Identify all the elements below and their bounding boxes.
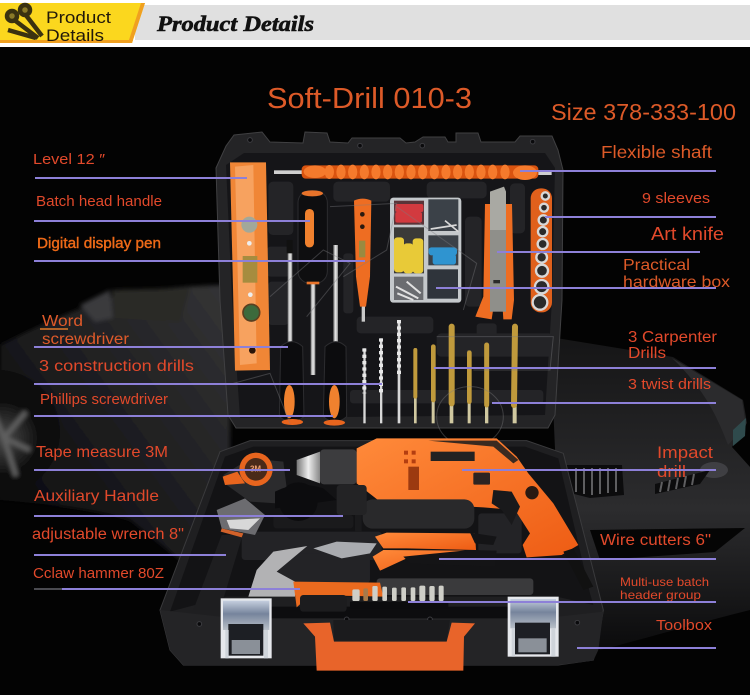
tool: nut screwdriver — [298, 190, 327, 375]
tool: wire cutters — [313, 533, 497, 571]
tool: impact drill — [275, 438, 593, 590]
callout: Flexible shaft: Flexible shaft — [601, 142, 712, 162]
header bar — [0, 0, 750, 47]
header tag: yellow — [0, 3, 145, 43]
callout: Practical hardware box: Practical — [623, 257, 690, 274]
tool: socket sleeves — [531, 188, 552, 312]
callout: Impact drill: drill — [657, 462, 686, 481]
tool: claw hammer — [248, 546, 533, 612]
callout: Word screwdriver: Word — [42, 313, 83, 330]
callout: Multi-use batch header group: Multi-use batch — [620, 575, 709, 589]
case interior — [170, 447, 593, 612]
callout: Batch head handle: Batch head handle — [36, 194, 162, 210]
tool: drill bits — [363, 320, 517, 423]
case screws — [197, 617, 580, 626]
tool: tape measure: 3M — [250, 465, 261, 474]
callout: Multi-use batch header group: header group — [620, 588, 701, 602]
callout: Toolbox: Toolbox — [656, 617, 713, 634]
callout: Wire cutters: Wire cutters 6" — [600, 532, 711, 549]
background car right — [550, 337, 750, 650]
watermark — [233, 203, 553, 447]
callout: 3 construction drills: 3 construction drills — [39, 358, 194, 375]
size label: Size 378-333-100 — [551, 99, 736, 125]
tool: auxiliary handle — [273, 482, 474, 532]
tool: art knife — [475, 187, 514, 319]
callout: Practical hardware box: hardware box — [623, 274, 730, 291]
title: Soft-Drill 010-3: Soft-Drill 010-3 — [267, 83, 472, 115]
callout: Tape measure 3M: Tape measure 3M — [36, 444, 168, 461]
callout: Impact drill — [462, 443, 716, 481]
latch left — [221, 598, 272, 658]
panel: lower tool case — [160, 438, 603, 671]
callout: Word screwdriver: screwdriver — [42, 331, 129, 348]
callout: Toolbox — [577, 617, 716, 648]
callout: 3 Carpenter Drills — [434, 329, 717, 368]
tool: spirit level — [230, 162, 270, 371]
tool: flexible shaft — [274, 165, 552, 180]
case shell — [216, 132, 563, 428]
tag text — [46, 8, 111, 45]
case front — [160, 610, 603, 665]
callout: Impact drill: Impact — [657, 443, 713, 462]
callout: 3 twist drills: 3 twist drills — [628, 377, 711, 393]
case tray — [226, 153, 555, 418]
tool: batch head group — [350, 586, 448, 609]
callout: Auxiliary Handle: Auxiliary Handle — [34, 488, 159, 505]
tool: digital display pen — [354, 199, 371, 322]
tool: slotted screwdriver — [279, 240, 304, 425]
callout: Level 12: Level 12 ″ — [33, 151, 106, 168]
panel: upper tool case — [216, 132, 563, 447]
case shell — [160, 441, 603, 665]
callout: Cclaw hammer: Cclaw hammer 80Z — [33, 565, 164, 582]
heading: Product Details: Product Details — [156, 11, 314, 36]
callout: Art knife: Art knife — [651, 224, 724, 244]
case handle — [303, 620, 475, 671]
foam ledges — [242, 513, 522, 583]
callout: Practical hardware box — [436, 257, 730, 291]
callout: adjustable wrench: adjustable wrench 8" — [32, 526, 184, 543]
callout: 3 Carpenter Drills: 3 Carpenter — [628, 329, 717, 346]
tag text: Product — [46, 8, 111, 27]
latch right — [508, 597, 559, 657]
background car left — [0, 285, 230, 600]
icon: tools — [7, 5, 42, 38]
case screws — [248, 138, 535, 148]
tray recesses — [267, 182, 553, 403]
tool: hardware box — [390, 198, 461, 303]
tool: adjustable wrench — [193, 498, 265, 610]
callout: 9 sleeves: 9 sleeves — [642, 190, 710, 207]
callout: Digital display pen: Digital display pen — [37, 236, 161, 252]
callout: Word screwdriver — [34, 313, 288, 348]
tool: tape measure — [223, 453, 287, 503]
callout: Phillips screwdriver: Phillips screwdriver — [40, 392, 168, 408]
tag text: Details — [46, 26, 104, 45]
callout: 3 Carpenter Drills: Drills — [628, 345, 666, 362]
tool: phillips screwdriver — [323, 245, 347, 426]
callout: Multi-use batch header group — [408, 575, 716, 602]
